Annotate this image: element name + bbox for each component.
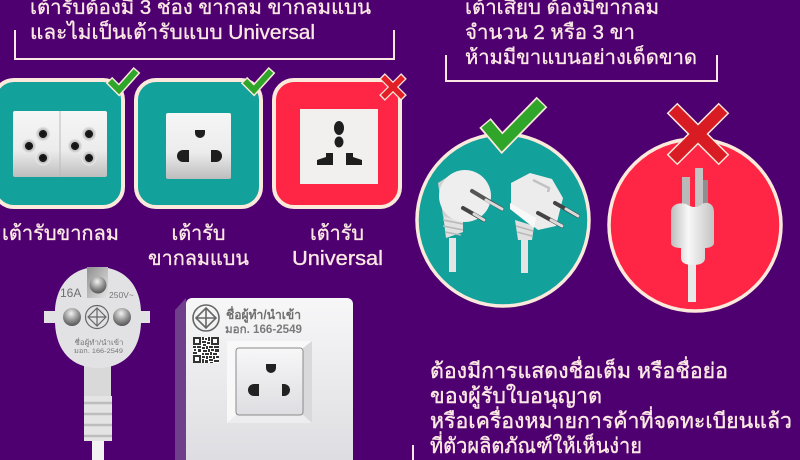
icon: flat pin plug [671,168,714,302]
heading: socket requirements [30,0,371,44]
label: round pin socket: เต้ารับขากลม [2,222,119,245]
icon: round plug two [510,173,578,273]
heading: plug requirements [465,0,697,69]
icon: check on round pin socket [109,70,137,90]
icon: QR code [193,337,219,363]
icon: large check [485,102,542,143]
text: marking requirement [430,356,792,458]
label: round and flat pin socket [148,222,249,270]
icon: large cross [672,108,724,160]
illustration: marked plug: 16A [60,286,81,300]
panel: round pin socket [0,80,123,207]
icon: standards mark on socket [193,305,219,331]
icon: cross on universal socket [382,76,404,98]
illustration: marked plug [44,267,150,460]
text: marking requirement: ของผู้รับใบอนุญาต [430,384,602,409]
heading: plug requirements: จำนวน 2 หรือ 3 ขา [465,21,635,44]
text: marking requirement: ที่ตัวผลิตภัณฑ์ให้เห็นง่าย [430,431,642,458]
panel: round and flat pin socket [136,80,261,207]
bracket: plug heading [446,55,717,81]
icon: check on round and flat pin socket [244,70,272,90]
illustration: marked socket: ชื่อผู้ทำ/นำเข้า [226,306,301,323]
text: marking requirement: ต้องมีการแสดงชื่อเต็ม หรือชื่อย่อ [430,356,728,383]
illustration: marked socket: มอก. 166-2549 [225,324,302,336]
panel: universal socket [274,80,400,207]
illustration: marked socket [175,298,353,460]
icon: standards mark on plug [86,306,108,328]
illustration: marked plug: มอก. 166-2549 [74,348,123,355]
heading: socket requirements: และไม่เป็นเต้ารับแบบ Universal [30,18,315,44]
illustration: marked plug: ชื่อผู้ทำ/นำเข้า [74,337,124,347]
label: round and flat pin socket: ขากลมแบน [148,247,249,270]
icon: round plug one [438,170,502,272]
panel: allowed plugs [417,134,589,306]
bracket: socket heading [15,30,394,59]
label: universal socket: เต้ารับ [310,222,364,245]
bracket: marking text [412,445,414,460]
label: round and flat pin socket: เต้ารับ [172,222,226,245]
label: universal socket: Universal [292,247,383,270]
heading: plug requirements: ห้ามมีขาแบนอย่างเด็ดขาด [465,43,697,69]
text: marking requirement: หรือเครื่องหมายการค้าที่จดทะเบียนแล้ว [430,406,792,433]
panel: forbidden plug [609,139,781,311]
label: universal socket [292,222,383,270]
illustration: marked plug: 250V~ [109,290,134,300]
